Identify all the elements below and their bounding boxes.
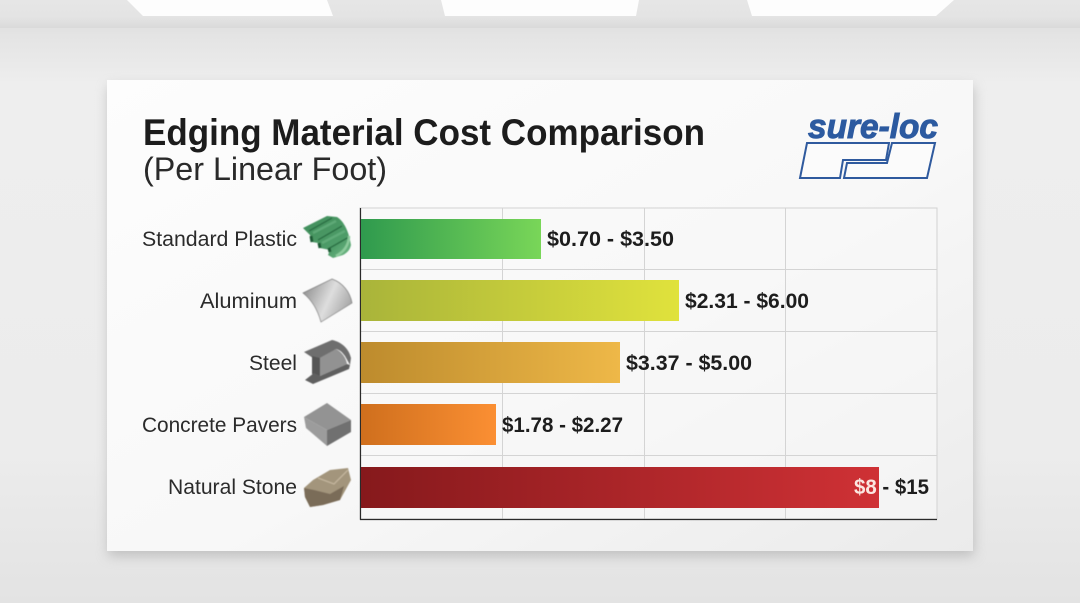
value: $0.70 - $3.50 [547,228,674,251]
subtitle: (Per Linear Foot) [143,151,387,187]
row: Natural Stone [168,467,929,508]
icon: steel beam [304,340,351,384]
row: Aluminum [200,279,809,322]
value: $2.31 - $6.00 [685,290,809,313]
row: Standard Plastic: Standard Plastic [142,228,297,251]
icon: natural stone [304,468,351,507]
main panel [107,80,973,551]
value: $1.78 - $2.27 [502,414,623,437]
row: Aluminum: Aluminum [200,290,297,313]
row: Concrete Pavers: Concrete Pavers [142,414,297,437]
value: $8 - $15 [854,476,929,499]
bar [361,404,496,445]
chart [142,208,937,520]
row: Steel: Steel [249,352,297,375]
icon: concrete paver [304,403,351,446]
ceiling light center [441,0,639,16]
logo: sure-loc [800,108,938,178]
bar [361,219,541,259]
chart plot area [360,208,937,519]
ceiling light right [747,0,954,16]
ceiling light left [127,0,333,16]
logo: sure-loc: sure-loc [808,108,938,146]
row: Natural Stone: Natural Stone [168,476,297,499]
bar [361,467,879,508]
row: Steel [249,340,752,384]
row: Standard Plastic [142,216,674,259]
panel shadow [108,86,974,556]
icon: plastic edging [303,216,351,258]
value: $3.37 - $5.00 [626,352,752,375]
row: Concrete Pavers [142,403,623,446]
bar [361,342,620,383]
icon: aluminum edging [303,279,352,322]
title: Edging Material Cost Comparison [143,112,705,153]
bar [361,280,679,321]
